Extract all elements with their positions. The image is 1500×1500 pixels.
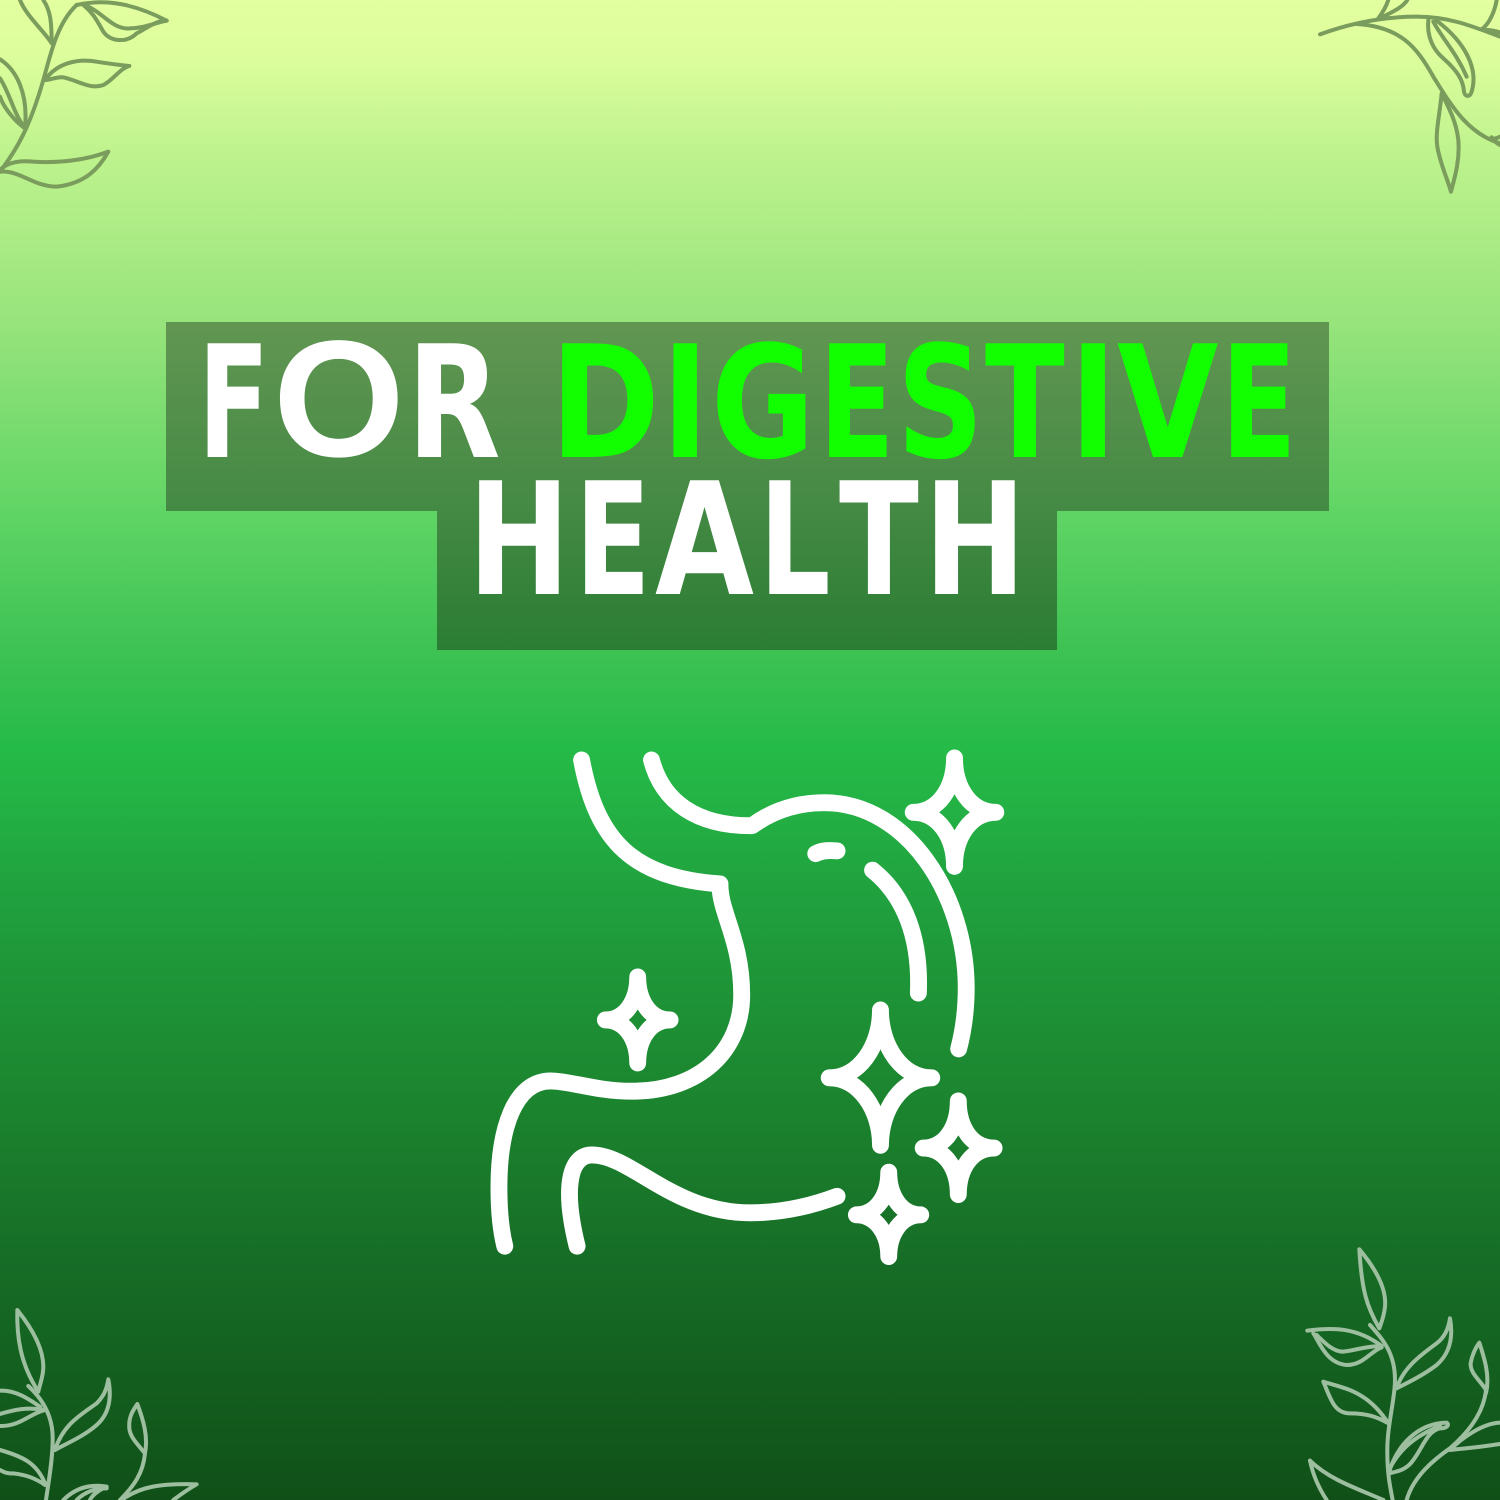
title: E [1221, 312, 1296, 494]
leaf decoration: top left [0, 0, 167, 187]
title: H [468, 449, 570, 631]
title line 2 [468, 449, 1026, 631]
title: T [985, 312, 1065, 494]
title: R [407, 312, 500, 494]
title: S [897, 312, 984, 494]
leaf decoration: bottom left [0, 1310, 197, 1500]
title: I [1070, 312, 1116, 494]
title: G [711, 312, 814, 494]
title: D [550, 312, 660, 494]
leaf decoration: top right [1320, 0, 1500, 192]
title banner [166, 322, 1329, 650]
title [198, 306, 1296, 631]
title: T [839, 449, 919, 631]
sparkles [605, 758, 996, 1257]
icon: stomach with sparkles [499, 758, 996, 1257]
title: L [759, 449, 830, 631]
title: V [1117, 312, 1219, 494]
leaf decoration: bottom right [1307, 1249, 1500, 1500]
title line 1 [198, 306, 1296, 494]
title: E [819, 312, 895, 494]
title: O [272, 306, 404, 492]
title: H [924, 449, 1026, 631]
title: F [198, 312, 269, 494]
title: A [655, 449, 754, 631]
stomach outline [499, 760, 966, 1246]
title: E [575, 449, 650, 631]
title: I [662, 312, 709, 494]
